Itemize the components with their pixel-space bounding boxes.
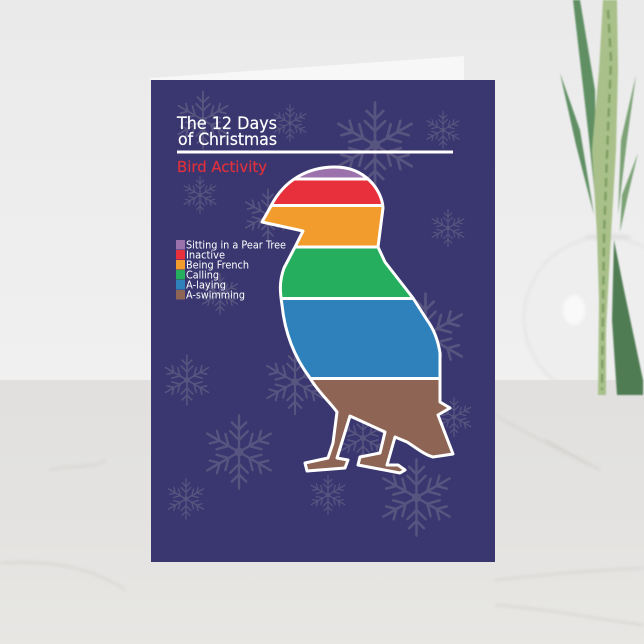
band: Calling — [282, 248, 410, 297]
glass vase — [524, 234, 644, 399]
snowflake pattern — [163, 91, 473, 536]
band: Sitting in a Pear Tree — [300, 168, 364, 178]
greeting card back page — [150, 56, 464, 80]
band: Being French — [264, 207, 382, 246]
legend item: Inactive: Inactive — [186, 248, 225, 262]
background: wall — [0, 0, 644, 381]
title — [176, 113, 277, 149]
legend item: A-laying: A-laying — [186, 278, 226, 292]
title: The 12 Days — [176, 113, 277, 133]
band: A-laying — [282, 300, 438, 377]
legend item: Sitting in a Pear Tree: Sitting in a Pear Tree — [186, 238, 286, 252]
band: Inactive — [274, 180, 381, 204]
legend item: Calling: Calling — [186, 268, 219, 282]
title: of Christmas — [178, 129, 277, 149]
plant stems and leaves — [560, 0, 643, 395]
legend — [176, 238, 286, 302]
legend item: A-swimming: A-swimming — [186, 288, 245, 302]
band: A-swimming — [306, 380, 451, 472]
title rule — [177, 150, 453, 154]
background: marble table — [0, 380, 644, 644]
card front panel — [151, 80, 495, 562]
subtitle: Bird Activity — [177, 158, 267, 176]
legend item: Being French: Being French — [186, 258, 249, 272]
bird chart — [260, 166, 454, 474]
